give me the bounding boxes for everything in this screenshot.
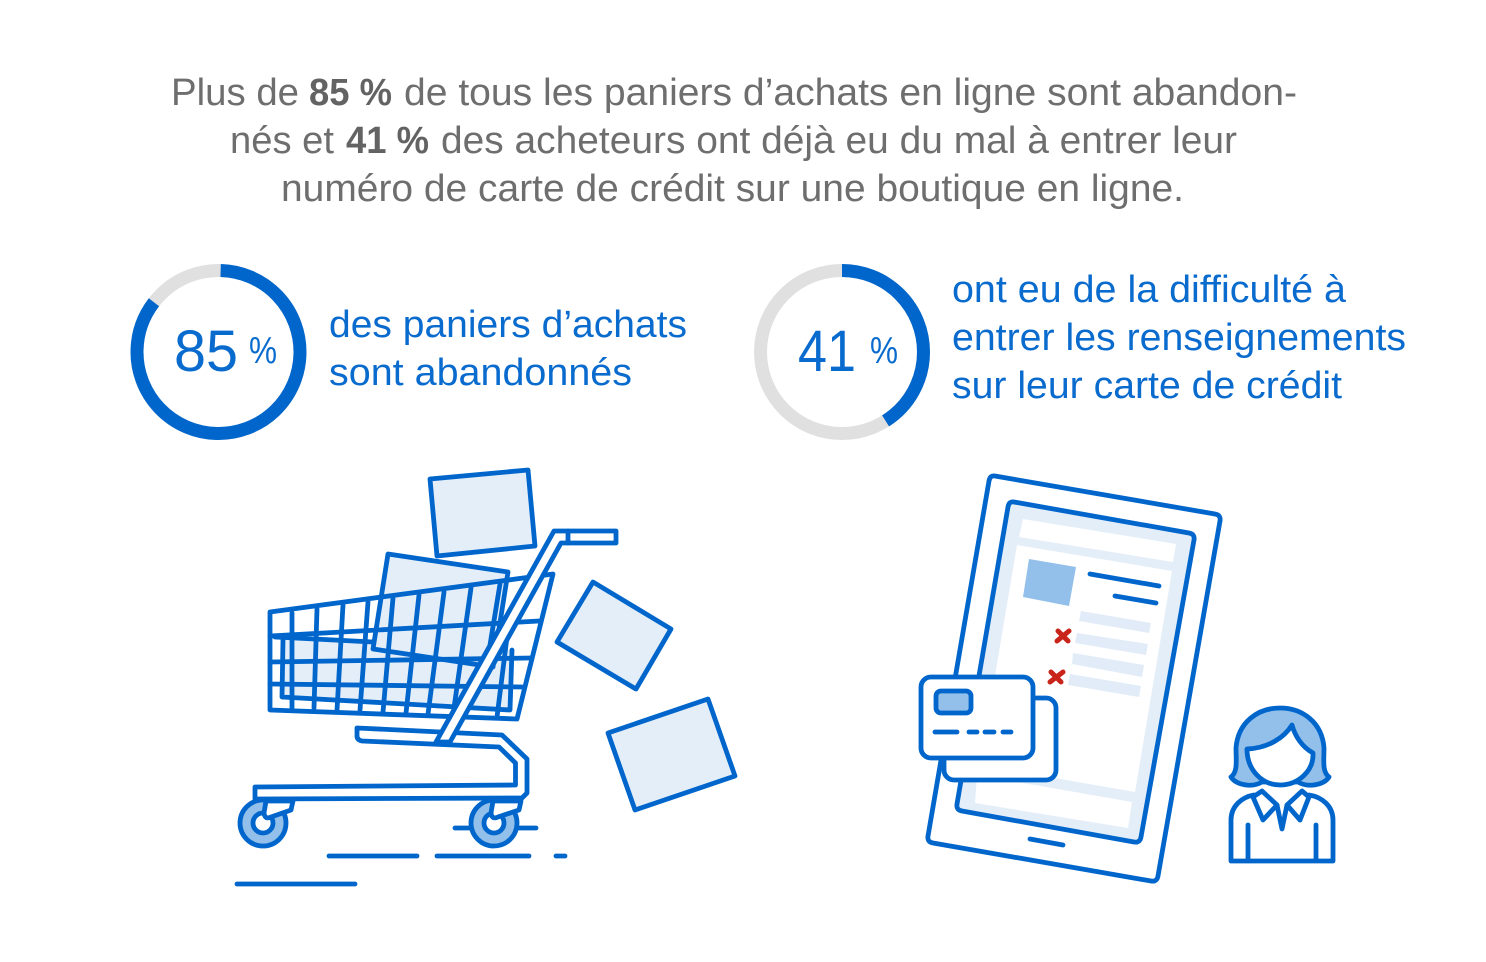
box falling bottom right [608,699,735,810]
title paragraph: des acheteurs ont déjà eu du mal à entrer leur [441,120,1237,162]
tablet body [928,476,1220,881]
motion lines [237,828,565,884]
box inside cart back [282,640,512,710]
label: 85 % text [329,304,687,394]
label: 41 % text: ont eu de la difficulté à [952,269,1347,311]
form fields [1068,611,1151,697]
illustration: tablet with credit cards [921,476,1220,881]
screen header [1019,519,1176,562]
wheel left [240,800,293,846]
donut chart: 41 %: % [870,330,898,372]
cart handle [436,531,616,742]
box falling right [557,582,671,689]
face [1247,725,1313,785]
title paragraph: numéro de carte de crédit sur une boutique en ligne. [281,168,1184,210]
title paragraph: nés et [230,120,334,162]
collar [1248,791,1316,860]
wheel right [471,800,521,846]
box falling top [430,470,535,556]
donut chart: 41 %: 41 [798,319,856,384]
donut chart: 41 % [760,270,924,434]
screen content [980,545,1172,792]
label: 41 % text: entrer les renseignements [952,317,1406,359]
product text lines [1090,574,1159,603]
box inside cart front [373,554,508,667]
label: 85 % text: sont abandonnés [329,352,632,394]
back credit card [944,698,1056,780]
title paragraph: 41 % [346,120,429,162]
cart base frame [255,728,527,799]
front credit card [921,677,1033,758]
product image [1023,559,1076,606]
title paragraph: 85 % [309,72,392,114]
label: 85 % text: des paniers d’achats [329,304,687,346]
title paragraph: de tous les paniers d’achats en ligne sont abandon- [404,72,1297,114]
illustration: shopping cart with falling boxes [237,470,735,884]
label: 41 % text: sur leur carte de crédit [952,365,1342,407]
tablet home button [1030,839,1063,845]
tablet screen [957,502,1194,842]
basket wires [270,574,553,719]
icon: woman customer [1231,708,1333,861]
hair [1231,708,1329,785]
donut chart: 85 %: % [249,330,277,372]
title paragraph [171,72,1297,210]
torso [1231,795,1333,861]
donut chart: 85 %: 85 [174,319,238,384]
label: 41 % text [952,269,1406,407]
title paragraph: Plus de [171,72,299,114]
error marks [1050,631,1069,682]
screen footer [975,775,1132,828]
donut chart: 85 % [135,268,302,436]
